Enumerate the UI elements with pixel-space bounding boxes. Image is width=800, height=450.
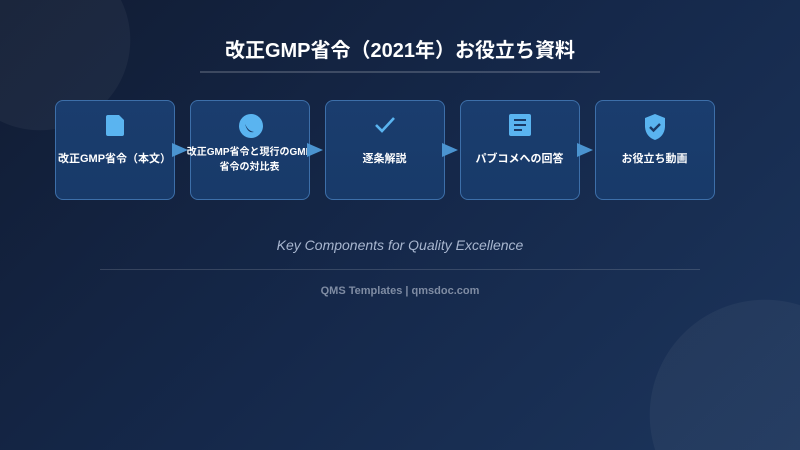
- panel: step 3: [325, 100, 445, 200]
- icon: document: [106, 115, 124, 136]
- panel: step 4: パブコメへの回答: [476, 153, 564, 165]
- icon: note: [509, 114, 531, 136]
- arrow: [172, 143, 188, 157]
- panel: step 4: [460, 100, 580, 200]
- arrow: [577, 143, 593, 157]
- footer: QMS Templates | qmsdoc.com: [321, 285, 479, 297]
- icon: circle: [239, 114, 263, 138]
- panel: step 2: 改正GMP省令と現行のGMP: [187, 147, 312, 158]
- panel: step 3: 逐条解説: [362, 153, 406, 165]
- icon: check: [375, 117, 395, 133]
- subtitle: Key Components for Quality Excellence: [277, 237, 523, 253]
- panel: step 5: お役立ち動画: [622, 153, 688, 165]
- arrow: [307, 143, 323, 157]
- panel: step 1: [55, 100, 175, 200]
- title: 改正GMP省令（2021年）お役立ち資料: [225, 40, 575, 62]
- panel: step 2: [190, 100, 310, 200]
- arrow: [442, 143, 458, 157]
- panel: step 1: 改正GMP省令（本文）: [58, 153, 171, 165]
- icon: shield: [645, 114, 665, 140]
- panel: step 5: [595, 100, 715, 200]
- panel: step 2: 省令の対比表: [220, 162, 280, 173]
